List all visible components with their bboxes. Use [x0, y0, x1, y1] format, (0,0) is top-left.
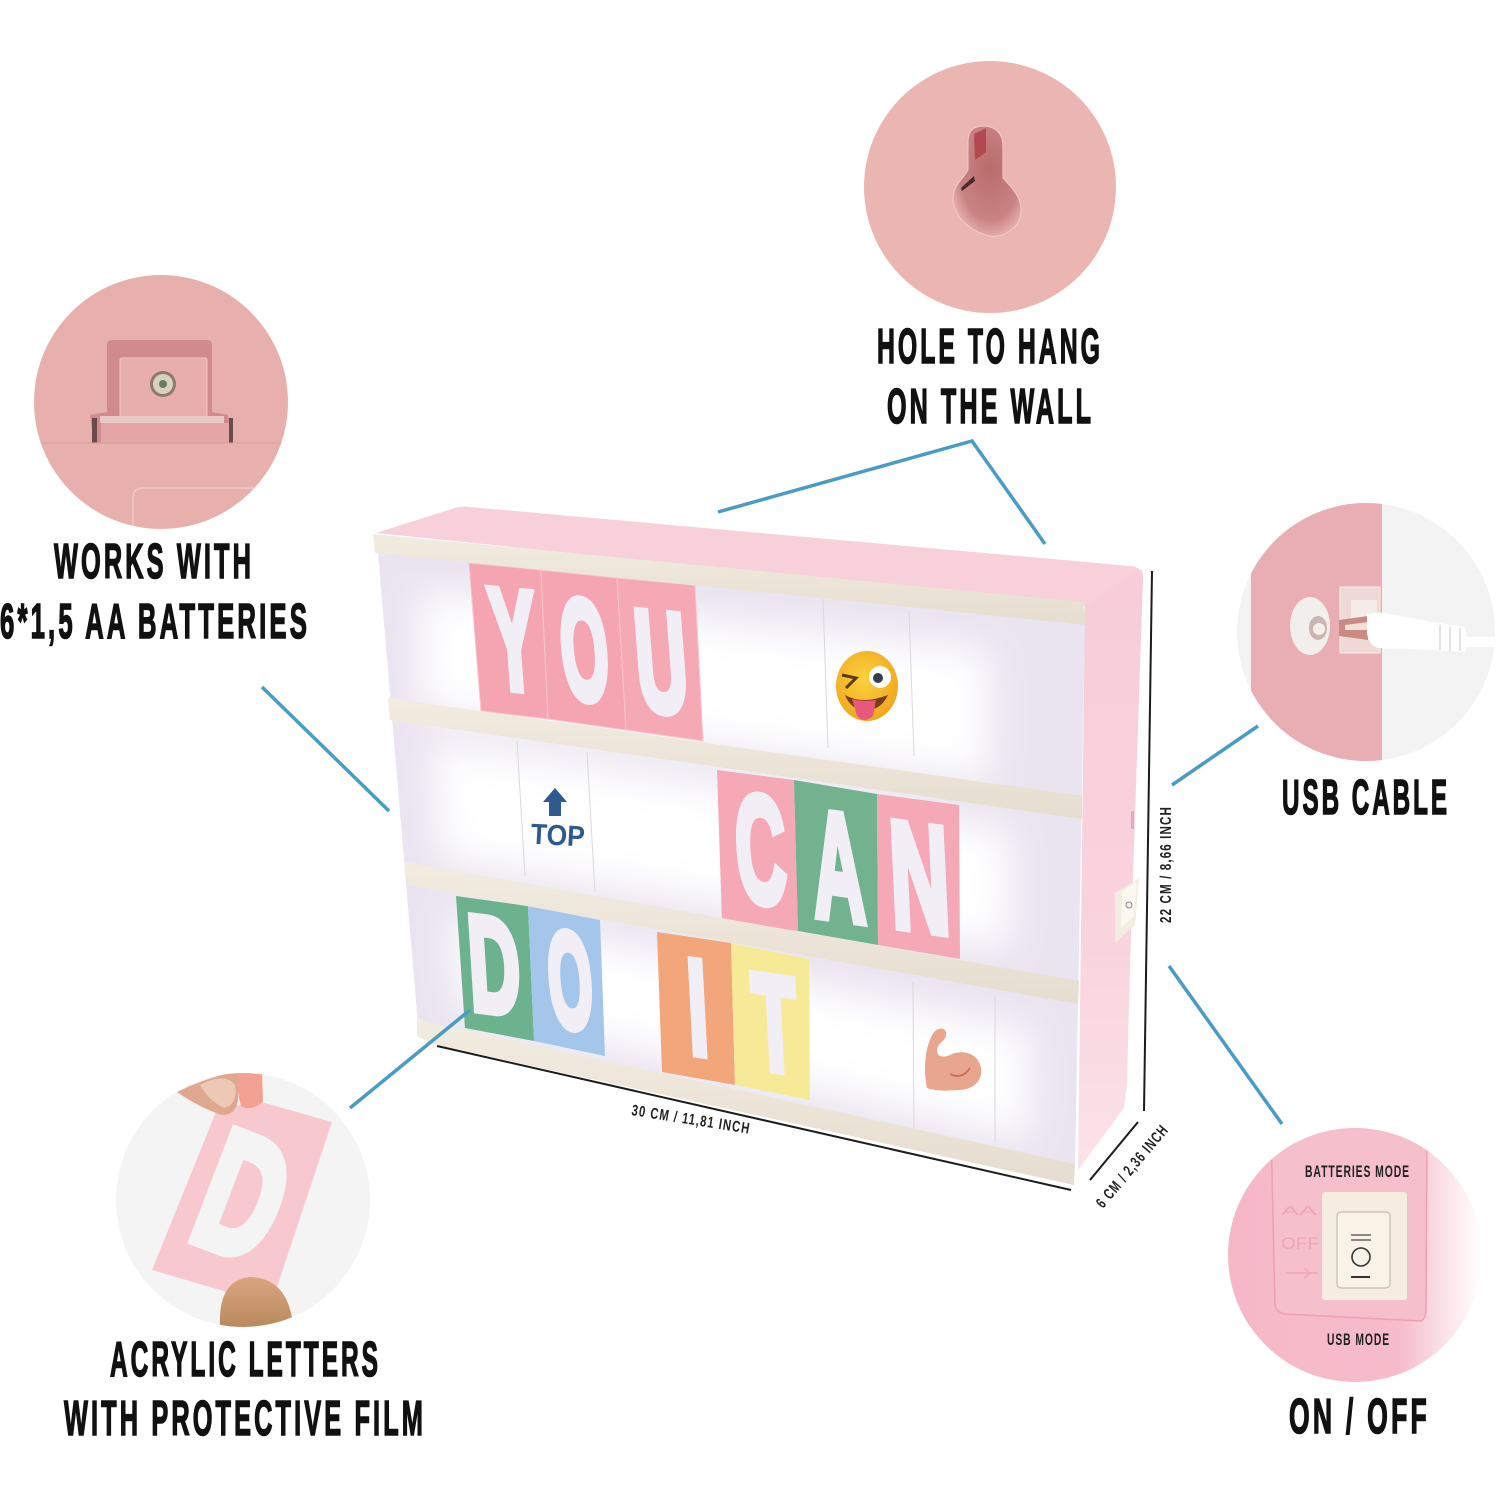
icon: top arrow with TOP label: [530, 788, 586, 853]
panel: on / off switch: [1169, 966, 1482, 1444]
callout leader lines: [718, 441, 1045, 544]
heading: hole to hang: HOLE TO HANG: [877, 320, 1103, 374]
dimension: width: [437, 1046, 1071, 1190]
heading: acrylic letters: [64, 1333, 426, 1446]
dimension: depth: 6 CM / 2,36 INCH: [1093, 1122, 1172, 1212]
leader line: [350, 1010, 470, 1108]
letter tiles row 1: YOU: U: [629, 580, 693, 744]
letter tiles row 1: YOU: [469, 559, 703, 744]
letter tiles row 1: YOU: O: [554, 570, 614, 733]
letter tiles row 1: YOU: Y: [484, 559, 542, 722]
letter tiles row 2: CAN: N: [886, 788, 953, 966]
icon: flexed bicep emoji: [925, 1028, 981, 1091]
letter tiles row 3: DO IT: I: [684, 930, 711, 1084]
panel: hole to hang on the wall: [718, 61, 1116, 544]
heading: acrylic letters: WITH PROTECTIVE FILM: [64, 1392, 426, 1446]
icon: top arrow with TOP label: TOP: [530, 819, 586, 853]
letter tiles row 2: CAN: C: [732, 763, 790, 939]
dimension: height: [1144, 571, 1175, 1111]
heading: works with batteries: 6*1,5 AA BATTERIES: [0, 595, 310, 649]
dimension: depth: [1090, 1122, 1172, 1212]
photo circle: rocker switch: AA: [1281, 1203, 1318, 1218]
leader line: [1169, 966, 1282, 1124]
letter tiles row 3: DO IT: [456, 886, 810, 1102]
letter tiles row 3: DO IT: O: [543, 903, 597, 1060]
heading: acrylic letters: ACRYLIC LETTERS: [110, 1333, 381, 1387]
photo circle: letter D held by fingers: [116, 1071, 370, 1328]
letter tiles row 3: DO IT: T: [749, 945, 800, 1102]
heading: works with batteries: WORKS WITH: [54, 535, 254, 589]
box body: top and right side: [376, 507, 1143, 1170]
letter tiles row 2: CAN: A: [809, 779, 868, 956]
frame rails: [373, 534, 1086, 1185]
letter tiles row 2: CAN: [717, 763, 960, 966]
dimension: height: 22 CM / 8,66 INCH: [1158, 806, 1175, 923]
side vent and power switch: [1115, 811, 1139, 943]
photo circle: letter D held by fingers: D: [172, 1095, 314, 1300]
light panel face: [378, 552, 1085, 1168]
product: lightbox: [373, 507, 1175, 1212]
heading: hole to hang: ON THE WALL: [887, 380, 1094, 434]
photo circle: USB port: [1237, 500, 1497, 770]
photo circle: rocker switch: OFF: [1281, 1234, 1319, 1253]
photo circle: rocker switch: [1228, 1128, 1482, 1382]
dimension: width: 30 CM / 11,81 INCH: [630, 1102, 752, 1138]
photo circle: keyhole: [864, 61, 1116, 313]
panel: USB cable: [1172, 500, 1497, 825]
leader line: [262, 687, 389, 811]
photo circle: rocker switch: USB MODE: [1327, 1330, 1390, 1349]
leader line: [1172, 726, 1258, 785]
photo circle: rocker switch: BATTERIES MODE: [1305, 1162, 1410, 1181]
letter tiles row 3: DO IT: D: [464, 886, 524, 1044]
icon: winking emoji: [836, 651, 898, 721]
heading: works with batteries: [0, 535, 310, 649]
heading: hole to hang: [877, 320, 1103, 434]
panel: acrylic letters: [64, 1010, 470, 1446]
photo circle: battery compartment: [30, 275, 292, 535]
panel: batteries: [0, 275, 389, 811]
